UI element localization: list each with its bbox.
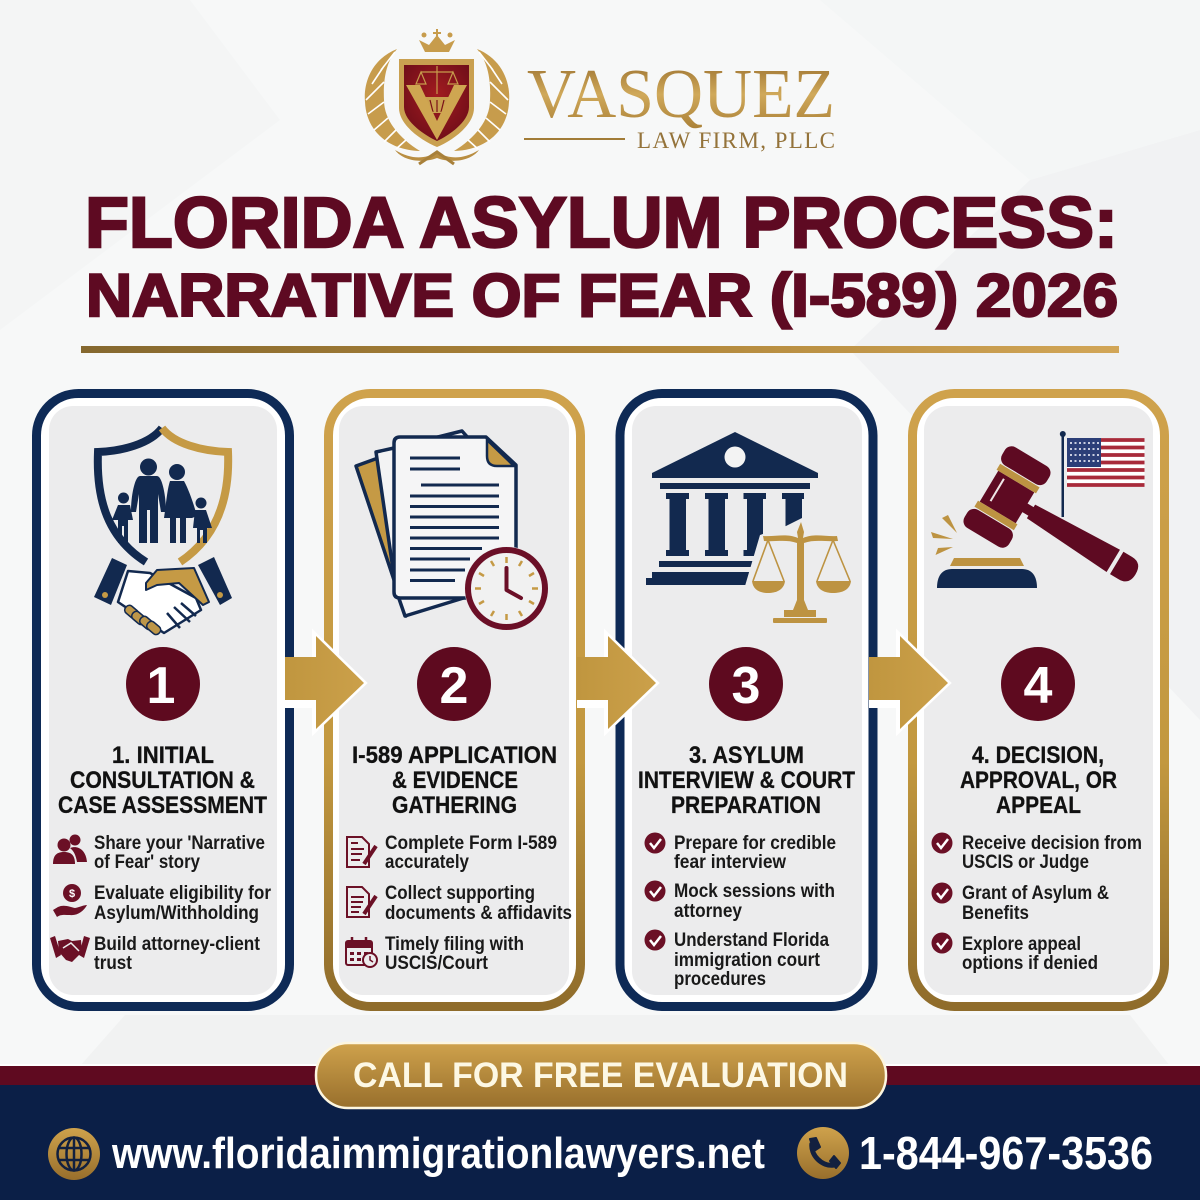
website: www.floridaimmigrationlawyers.net: [111, 1129, 765, 1178]
logo: shield: [399, 59, 474, 147]
panel: step 1: [36, 394, 290, 1006]
list: step 3: immigration court: [674, 950, 821, 971]
icon: document with pen: [347, 887, 376, 917]
heading: step 2: & EVIDENCE: [392, 767, 518, 794]
list: step 1: Build attorney-client: [94, 934, 261, 955]
heading: step 3: [638, 742, 855, 819]
step number 3: 3: [732, 657, 760, 715]
icon: family shield and handshake: [94, 428, 232, 636]
step number 2: 2: [440, 657, 468, 715]
icon: form with pen: [347, 837, 376, 867]
panel: step 4: [912, 394, 1164, 1006]
icon: hand with coin: [53, 884, 87, 917]
heading: step 4: 4. DECISION,: [972, 742, 1104, 769]
logo: firm name: VASQUEZ: [527, 56, 835, 133]
arrow: step 3 to 4: [869, 636, 948, 729]
heading: step 2: I-589 APPLICATION: [352, 742, 557, 769]
list: step 3: [644, 832, 836, 990]
icon: check: [932, 882, 952, 904]
list: step 4: Benefits: [962, 903, 1029, 924]
icon: handshake: [50, 936, 90, 962]
list: step 2: Timely filing with: [385, 934, 524, 955]
heading: step 2: [352, 742, 557, 819]
icon: hand with coin: $: [69, 888, 75, 900]
heading: step 3: 3. ASYLUM: [689, 742, 804, 769]
heading: step 1: CASE ASSESSMENT: [58, 792, 267, 819]
list: step 3: Prepare for credible: [674, 833, 836, 854]
arrow: step 1 to 2: [285, 636, 364, 729]
list: step 1: [50, 833, 272, 974]
list: step 4: USCIS or Judge: [962, 852, 1089, 873]
list: step 1: trust: [94, 953, 133, 974]
step number 4: 4: [1024, 657, 1053, 715]
list: step 4: Grant of Asylum &: [962, 883, 1109, 904]
icon: courthouse and scales: [646, 432, 860, 630]
heading: step 1: CONSULTATION &: [70, 767, 255, 794]
icon: check: [644, 930, 666, 950]
list: step 3: attorney: [674, 901, 742, 922]
logo: crown: [419, 29, 455, 52]
phone number: 1-844-967-3536: [859, 1127, 1153, 1179]
list: step 3: procedures: [674, 969, 766, 990]
step number 2: [417, 647, 491, 721]
icon: calendar with clock: [346, 937, 377, 967]
panel: step 3: [620, 394, 873, 1006]
icon: gavel and flag: [931, 431, 1160, 615]
title: NARRATIVE OF FEAR (I-589) 2026: [86, 262, 1118, 329]
heading: step 4: APPROVAL, OR: [960, 767, 1117, 794]
icon: check: [932, 932, 952, 954]
list: step 3: Understand Florida: [674, 930, 829, 951]
footer band: [0, 1064, 1200, 1200]
logo: [365, 29, 835, 164]
step number 4: [1001, 647, 1075, 721]
heading: step 3: PREPARATION: [671, 792, 821, 819]
heading: step 3: INTERVIEW & COURT: [638, 767, 855, 794]
list: step 4: [932, 832, 1142, 974]
icon: check: [932, 832, 952, 854]
heading: step 2: GATHERING: [392, 792, 517, 819]
logo: laurel wreath: [365, 49, 509, 164]
list: step 2: documents & affidavits: [385, 903, 572, 924]
icon: globe: [48, 1128, 100, 1180]
call to action button: [316, 1043, 886, 1108]
icon: phone: [797, 1127, 849, 1179]
list: step 3: Mock sessions with: [674, 881, 835, 902]
list: step 4: options if denied: [962, 953, 1098, 974]
list: step 1: Evaluate eligibility for: [94, 883, 272, 904]
heading: step 1: [58, 742, 267, 819]
icon: check: [644, 880, 666, 902]
list: step 1: Asylum/Withholding: [94, 903, 259, 924]
call to action button: CALL FOR FREE EVALUATION: [353, 1056, 848, 1095]
icon: US flag: [1060, 431, 1144, 517]
heading: step 1: 1. INITIAL: [112, 742, 214, 769]
list: step 2: Collect supporting: [385, 883, 535, 904]
icon: people: [53, 834, 87, 864]
list: step 1: of Fear' story: [94, 852, 200, 873]
list: step 4: Receive decision from: [962, 833, 1142, 854]
arrow: step 2 to 3: [577, 636, 656, 729]
title: [85, 184, 1118, 329]
list: step 2: Complete Form I-589: [385, 833, 557, 854]
step number 1: 1: [147, 657, 175, 715]
heading: step 4: APPEAL: [996, 792, 1081, 819]
list: step 2: USCIS/Court: [385, 953, 489, 974]
list: step 2: [346, 833, 572, 974]
heading: step 4: [960, 742, 1117, 819]
title: FLORIDA ASYLUM PROCESS:: [85, 184, 1118, 263]
list: step 2: accurately: [385, 852, 469, 873]
panel: step 2: [328, 394, 580, 1006]
logo: subtitle: LAW FIRM, PLLC: [637, 128, 835, 153]
icon: check: [644, 832, 666, 854]
list: step 3: fear interview: [674, 852, 786, 873]
step number 1: [126, 647, 200, 721]
step number 3: [709, 647, 783, 721]
icon: documents and clock: [356, 431, 548, 630]
list: step 4: Explore appeal: [962, 934, 1081, 955]
list: step 1: Share your 'Narrative: [94, 833, 265, 854]
